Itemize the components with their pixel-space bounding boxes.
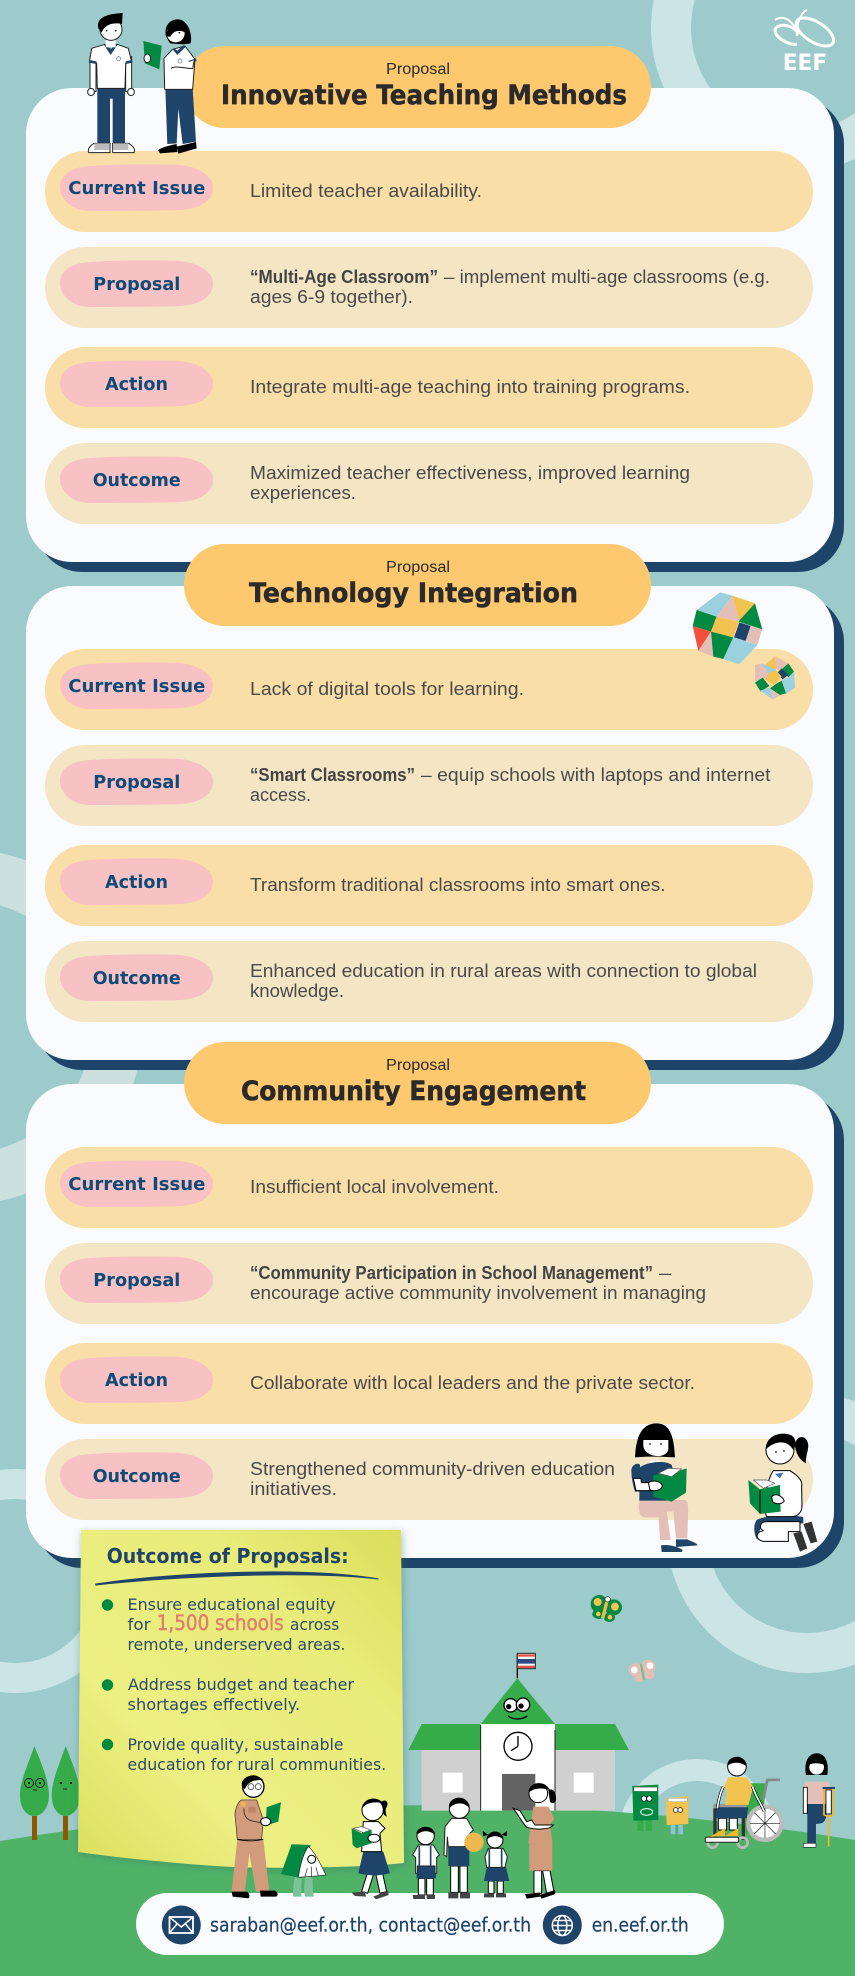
heading: Community Engagement: Proposal xyxy=(386,1057,450,1074)
row: current issue: Limited teacher availability. xyxy=(250,181,482,201)
heading: Community Engagement: Community Engagement xyxy=(241,1076,586,1107)
icon: two students with tablet xyxy=(88,13,197,154)
contact bar xyxy=(136,1893,724,1955)
icon: bigger boy xyxy=(444,1798,484,1898)
icon: envelope xyxy=(162,1906,201,1944)
heading: Innovative Teaching Methods xyxy=(184,46,651,128)
contact bar: en.eef.or.th xyxy=(592,1914,689,1936)
heading: Technology Integration: Proposal xyxy=(386,559,450,576)
row: current issue xyxy=(45,1147,813,1228)
row: action: Action xyxy=(105,872,168,893)
row: outcome xyxy=(45,941,813,1022)
row: proposal: access. xyxy=(250,785,311,805)
row: action: Transform traditional classrooms into smart ones. xyxy=(250,875,666,895)
row: proposal: – equip schools with laptops and internet xyxy=(421,765,770,785)
heading: Technology Integration: Technology Integration xyxy=(249,578,578,609)
row: action xyxy=(45,1343,813,1424)
bullet 1: remote, underserved areas. xyxy=(128,1635,346,1654)
row: outcome: knowledge. xyxy=(250,981,344,1001)
bullet 1: Ensure educational equity xyxy=(128,1595,336,1614)
row: outcome: Outcome xyxy=(93,1466,181,1487)
row: proposal: “Community Participation in School Management” xyxy=(250,1263,653,1283)
icon: book character xyxy=(281,1844,326,1897)
row: proposal: “Multi-Age Classroom” xyxy=(250,267,438,287)
bullet 2: Address budget and teacher xyxy=(128,1675,354,1694)
row: outcome: Outcome xyxy=(93,968,181,989)
row: proposal: Proposal xyxy=(93,274,180,295)
contact bar: saraban@eef.or.th, contact@eef.or.th xyxy=(210,1914,531,1936)
icon: kneeling girl reading xyxy=(748,1434,817,1552)
row: proposal: – implement multi-age classrooms (e.g. xyxy=(444,267,770,287)
bullet 1: across xyxy=(290,1615,339,1634)
heading: Innovative Teaching Methods: Proposal xyxy=(386,61,450,78)
icon: clock xyxy=(504,1732,532,1760)
sticky note: Outcome of Proposals xyxy=(78,1530,404,1868)
panel: Technology Integration xyxy=(26,586,844,1070)
row: proposal: ages 6-9 together). xyxy=(250,287,413,307)
row: action xyxy=(45,347,813,428)
row: current issue xyxy=(45,151,813,232)
icon: small boy xyxy=(413,1827,439,1899)
row: outcome: Strengthened community-driven education xyxy=(250,1459,615,1479)
row: current issue: Insufficient local involvement. xyxy=(250,1177,499,1197)
icon: green book character xyxy=(632,1785,658,1831)
icon: yellow book character xyxy=(666,1796,688,1834)
row: outcome xyxy=(45,443,813,524)
icon: pink butterfly xyxy=(629,1660,655,1682)
row: proposal xyxy=(45,247,813,328)
icon: trees xyxy=(20,1746,80,1840)
row: current issue xyxy=(45,649,813,730)
bullet 2 xyxy=(102,1675,354,1714)
bullet 1: for xyxy=(128,1615,151,1634)
bullet 3: Provide quality, sustainable xyxy=(128,1735,344,1754)
bullet 3 xyxy=(102,1735,386,1774)
note shadow xyxy=(78,1532,406,1870)
icon: globe xyxy=(543,1906,582,1944)
row: outcome: initiatives. xyxy=(250,1479,337,1499)
illustration: school building xyxy=(408,1653,629,1811)
bullet 1: 1,500 schools xyxy=(157,1611,284,1635)
icon: woman teacher xyxy=(513,1783,556,1899)
row: proposal: Proposal xyxy=(93,1270,180,1291)
row: action: Action xyxy=(105,374,168,395)
icon: small mosaic octagon xyxy=(755,656,795,699)
panel: Community Engagement xyxy=(26,1084,844,1568)
logo: EEF xyxy=(775,10,838,76)
icon: student with crutch xyxy=(803,1753,835,1847)
heading: Technology Integration xyxy=(184,544,651,626)
icon: seated girl reading xyxy=(631,1423,698,1552)
bullet 1 xyxy=(102,1595,346,1654)
note heading: Outcome of Proposals: xyxy=(107,1544,349,1568)
bullet 2: shortages effectively. xyxy=(128,1695,300,1714)
icon: large mosaic octagon xyxy=(693,592,762,664)
row: action: Collaborate with local leaders and the private sector. xyxy=(250,1373,695,1393)
row: proposal: encourage active community involvement in managing xyxy=(250,1283,706,1303)
row: current issue: Current Issue xyxy=(68,1174,205,1195)
row: current issue: Lack of digital tools for learning. xyxy=(250,679,524,699)
row: action: Integrate multi-age teaching into training programs. xyxy=(250,377,690,397)
row: action: Action xyxy=(105,1370,168,1391)
bullet 3: education for rural communities. xyxy=(128,1755,386,1774)
heading: Innovative Teaching Methods: Innovative Teaching Methods xyxy=(221,80,627,111)
icon: girl student with book xyxy=(352,1799,390,1899)
heading: Community Engagement xyxy=(184,1042,651,1124)
row: proposal: “Smart Classrooms” xyxy=(250,765,415,785)
row: outcome: experiences. xyxy=(250,483,356,503)
row: proposal: Proposal xyxy=(93,772,180,793)
row: outcome: Maximized teacher effectiveness, improved learning xyxy=(250,463,690,483)
row: outcome: Enhanced education in rural areas with connection to global xyxy=(250,961,757,981)
row: proposal xyxy=(45,1243,813,1324)
icon: student in wheelchair xyxy=(705,1757,782,1848)
logo: EEF: EEF xyxy=(783,51,827,76)
row: proposal xyxy=(45,745,813,826)
panel: Innovative Teaching Methods xyxy=(26,88,844,572)
row: proposal: – xyxy=(659,1263,671,1283)
icon: teacher man with tablet xyxy=(232,1776,281,1898)
row: outcome: Outcome xyxy=(93,470,181,491)
icon: thai flag xyxy=(517,1653,535,1669)
row: current issue: Current Issue xyxy=(68,676,205,697)
icon: small girl xyxy=(483,1831,509,1897)
row: current issue: Current Issue xyxy=(68,178,205,199)
icon: green butterfly xyxy=(591,1595,622,1622)
row: outcome xyxy=(45,1439,813,1520)
ground hill xyxy=(0,1805,855,1976)
row: action xyxy=(45,845,813,926)
